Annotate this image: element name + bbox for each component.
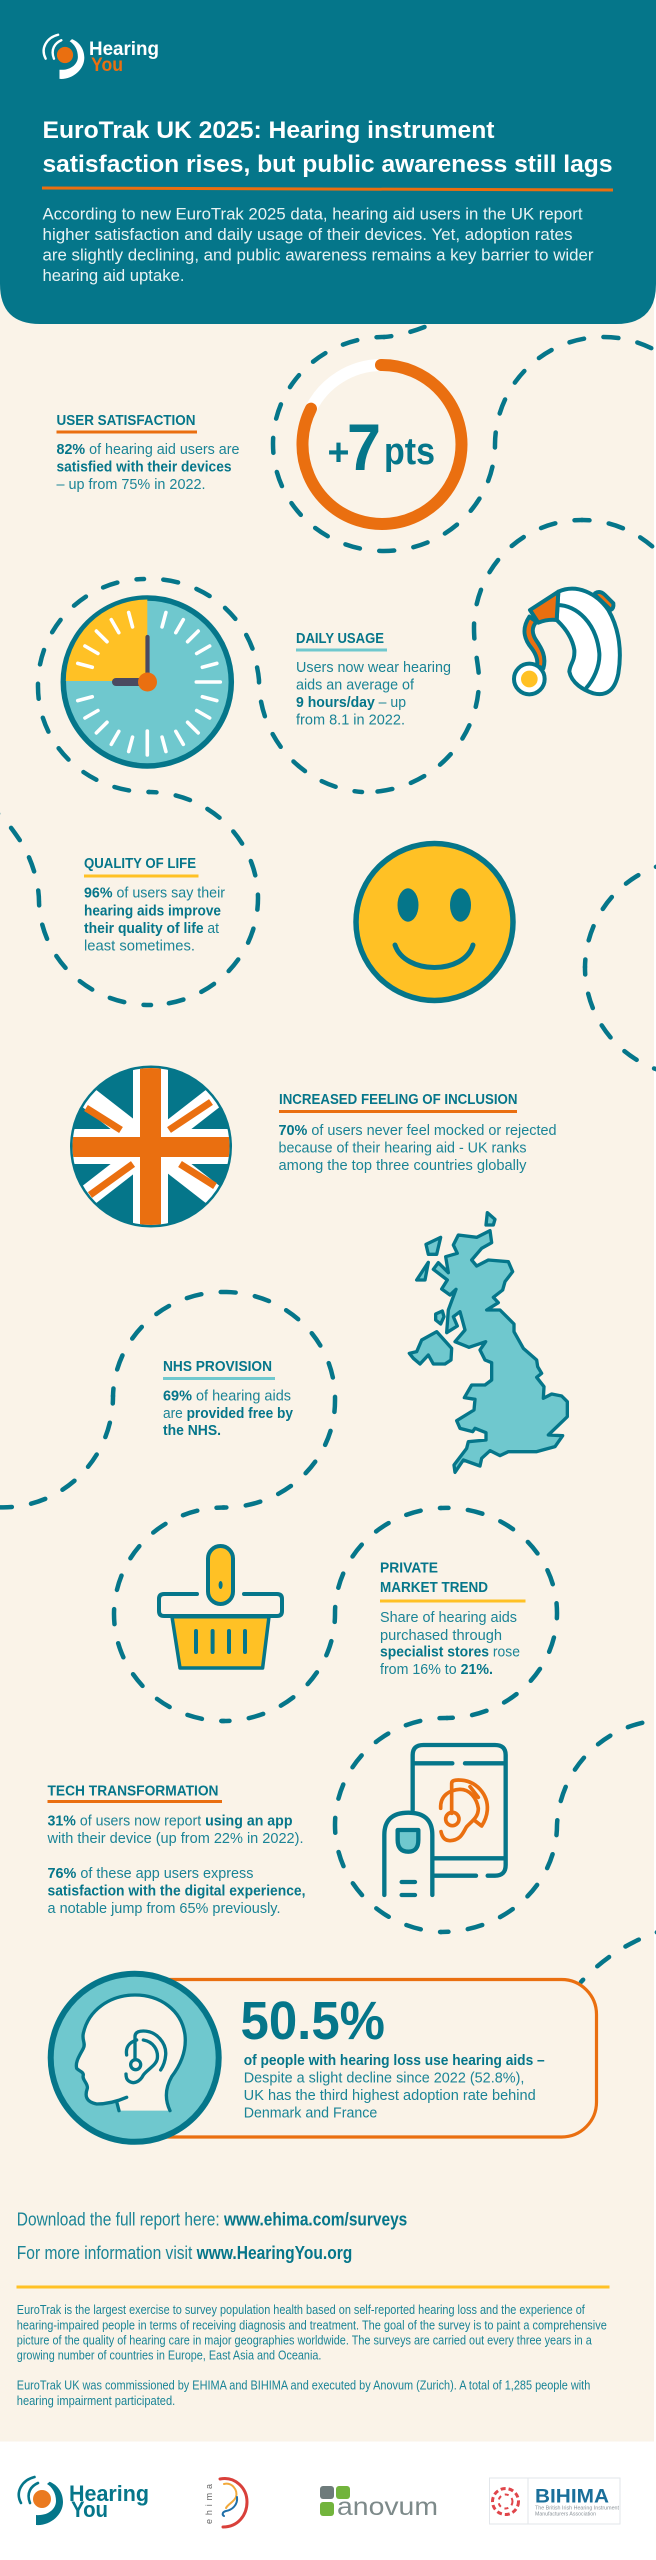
callout text: Despite a slight decline since 2022 (52.8%), <box>244 2071 524 2087</box>
icon: UK map <box>409 1213 567 1472</box>
panel: inclusion text: INCREASED FEELING OF INCLUSION <box>279 1092 518 1108</box>
panel: private market trend text <box>380 1561 526 1678</box>
panel: NHS provision text: 69% of hearing aids <box>163 1388 291 1404</box>
callout text: of people with hearing loss use hearing aids – <box>244 2053 545 2069</box>
panel: tech transformation text: with their device (up from 22% in 2022). <box>46 1831 303 1847</box>
chart: +7 pts ring: pts <box>384 431 435 473</box>
panel: private market trend text: PRIVATE <box>380 1561 438 1577</box>
panel: daily usage text: Users now wear hearing <box>296 660 451 676</box>
about text: growing number of countries in Europe, East Asia and Oceania. <box>17 2348 321 2362</box>
panel: quality of life text <box>84 856 225 954</box>
panel: header <box>0 0 656 324</box>
icon: smiley <box>356 844 513 1000</box>
panel: NHS provision text: are provided free by <box>163 1406 293 1422</box>
title: satisfaction rises, but public awareness still lags <box>42 151 612 178</box>
icon: phone with finger and ear <box>384 1745 506 1895</box>
panel: quality of life text: their quality of life at <box>84 921 219 937</box>
panel: inclusion text: 70% of users never feel mocked or rejected <box>278 1123 556 1139</box>
panel: tech transformation text: satisfaction with the digital experience, <box>48 1884 306 1900</box>
callout text: UK has the third highest adoption rate behind <box>244 2088 536 2104</box>
panel: quality of life text: least sometimes. <box>84 938 195 954</box>
callout box <box>120 1980 596 2137</box>
panel: daily usage text: 9 hours/day – up <box>296 695 406 711</box>
logo: Hearing You (header) <box>44 35 159 79</box>
logo: ehima: ehima <box>204 2484 214 2524</box>
logo: Hearing You (header): Hearing <box>89 39 159 60</box>
callout text: Denmark and France <box>244 2106 377 2122</box>
panel: NHS provision text: NHS PROVISION <box>163 1359 272 1375</box>
about text <box>17 2303 607 2408</box>
panel: private market trend text: Share of hearing aids <box>380 1610 517 1626</box>
panel: tech transformation text: a notable jump from 65% previously. <box>48 1901 280 1917</box>
links: Download the full report here: www.ehima.com/surveys <box>17 2210 407 2230</box>
icon: union jack flag <box>70 1066 232 1228</box>
links: For more information visit www.HearingYou.org <box>17 2243 352 2263</box>
panel: user satisfaction text: satisfied with their devices <box>56 460 232 476</box>
intro text: hearing aid uptake. <box>42 266 184 285</box>
title <box>42 117 612 178</box>
logo: BIHIMA: The British Irish Hearing Instrument <box>535 2506 620 2512</box>
logo: Hearing You (footer): Hearing <box>69 2481 149 2506</box>
panel: user satisfaction text <box>56 413 240 493</box>
panel: user satisfaction text: USER SATISFACTION <box>56 413 196 429</box>
logo: BIHIMA: BIHIMA <box>535 2487 609 2508</box>
chart: +7 pts ring <box>302 365 461 524</box>
icon: clock <box>63 598 231 766</box>
intro text: are slightly declining, and public awareness remains a key barrier to wider <box>42 246 594 264</box>
logo: BIHIMA <box>490 2478 620 2524</box>
panel: NHS provision text: the NHS. <box>163 1423 221 1439</box>
icon: hearing aid <box>514 589 620 694</box>
panel: 50.5% callout <box>51 1974 596 2142</box>
logo: Hearing You (header): You <box>91 55 123 76</box>
intro text: higher satisfaction and daily usage of their devices. Yet, adoption rates <box>42 225 572 244</box>
big number: 50.5% <box>240 1991 385 2051</box>
intro text <box>42 204 594 285</box>
panel: tech transformation text: 31% of users now report using an app <box>48 1814 293 1830</box>
logo: Hearing You (footer): You <box>71 2497 108 2522</box>
panel: daily usage text: from 8.1 in 2022. <box>296 712 405 728</box>
panel: quality of life text: 96% of users say their <box>84 886 225 902</box>
icon: head with hearing aid <box>51 1974 219 2142</box>
logo: anovum: anovum <box>337 2493 438 2521</box>
panel: user satisfaction text: 82% of hearing aid users are <box>56 442 240 458</box>
panel: private market trend text: from 16% to 21%. <box>380 1662 493 1678</box>
logo: BIHIMA: Manufacturers Association <box>535 2512 596 2518</box>
about text: hearing impairment participated. <box>17 2394 175 2408</box>
panel: private market trend text: specialist stores rose <box>380 1645 520 1661</box>
icon: shopping basket <box>159 1546 282 1668</box>
logo: Hearing You (footer) <box>19 2477 149 2525</box>
panel: daily usage text: DAILY USAGE <box>296 631 384 647</box>
panel: daily usage text <box>296 631 451 728</box>
links <box>17 2210 407 2263</box>
panel: inclusion text: among the top three countries globally <box>278 1158 527 1174</box>
intro text: According to new EuroTrak 2025 data, hearing aid users in the UK report <box>42 204 583 224</box>
panel: inclusion text <box>278 1092 556 1174</box>
panel: inclusion text: because of their hearing aid - UK ranks <box>278 1141 526 1157</box>
panel: tech transformation text: TECH TRANSFORMATION <box>48 1784 218 1800</box>
panel: daily usage text: aids an average of <box>296 678 415 694</box>
callout text <box>244 2053 545 2122</box>
panel: tech transformation text <box>46 1784 305 1917</box>
logo: anovum <box>320 2486 438 2521</box>
panel: private market trend text: MARKET TREND <box>380 1580 488 1596</box>
panel: quality of life text: hearing aids improve <box>84 904 221 920</box>
panel: private market trend text: purchased through <box>380 1628 502 1644</box>
chart: +7 pts ring: 7 <box>347 410 381 484</box>
about text: EuroTrak is the largest exercise to survey population health based on self-reported hearing loss and the experience of <box>17 2303 585 2317</box>
title: EuroTrak UK 2025: Hearing instrument <box>42 117 495 144</box>
panel: tech transformation text: 76% of these app users express <box>48 1866 254 1882</box>
logo: ehima <box>204 2479 247 2527</box>
panel: user satisfaction text: – up from 75% in 2022. <box>56 477 206 493</box>
dashed connecting path <box>0 318 656 1982</box>
chart: +7 pts ring: + <box>328 432 350 474</box>
panel: quality of life text: QUALITY OF LIFE <box>84 856 196 872</box>
about text: EuroTrak UK was commissioned by EHIMA and BIHIMA and executed by Anovum (Zurich). A total of 1,285 people with <box>17 2379 590 2393</box>
panel: NHS provision text <box>163 1359 293 1439</box>
